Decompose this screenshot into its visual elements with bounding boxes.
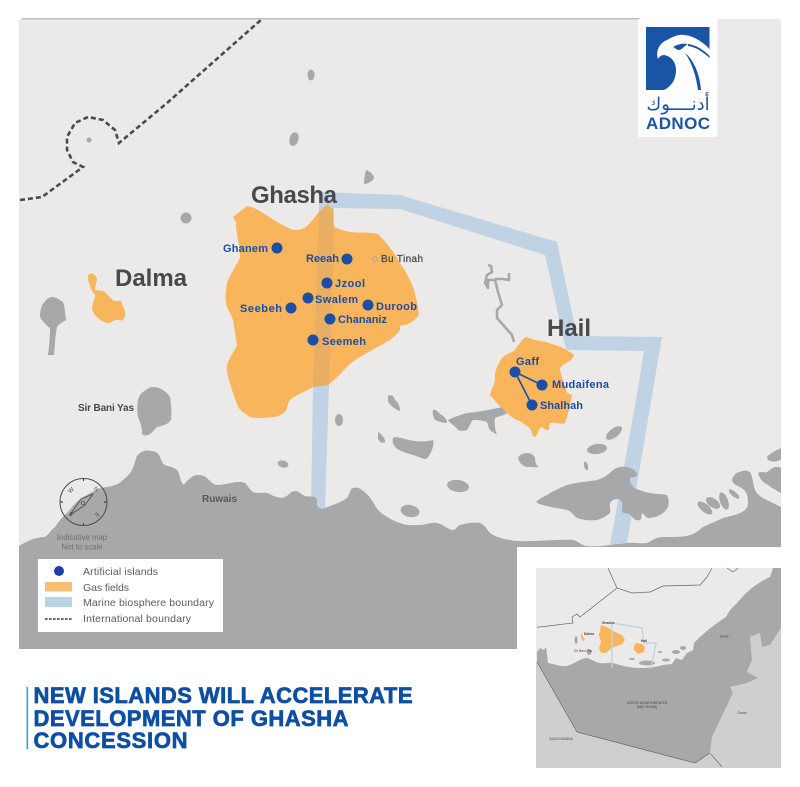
icon: falcon — [657, 35, 710, 90]
artificial island markers and names: Ghasha: Ghanem — [223, 243, 268, 255]
title: CONCESSION — [34, 728, 188, 753]
legend: gas fields — [45, 582, 129, 594]
inset: borders — [537, 568, 738, 767]
artificial island markers and names: Hail: Mudaifena — [552, 379, 610, 391]
inset: labels: Dubai — [720, 634, 729, 638]
inset: labels: Hail — [641, 639, 647, 643]
region label: Dalma: Dalma — [115, 265, 188, 292]
place label: Sir Bani Yas: Sir Bani Yas — [78, 403, 134, 414]
icon: compass: S — [68, 510, 75, 517]
artificial island markers and names: Ghasha: Chananiz — [338, 314, 388, 326]
inset: Abu Dhabi land — [537, 568, 781, 763]
icon: compass: W — [67, 486, 76, 495]
region label: Hail: Hail — [547, 315, 591, 342]
artificial island markers and names: Ghasha: Swalem — [315, 294, 358, 306]
artificial island markers and names: Ghasha: Seebeh — [240, 303, 282, 315]
artificial island markers and names: Ghasha — [223, 242, 417, 348]
legend: international boundary: International boundary — [83, 613, 192, 625]
inset: labels — [549, 621, 747, 741]
inset: gas fields — [581, 625, 645, 654]
land: mainland coast — [19, 450, 781, 649]
artificial island markers and names: Hail — [510, 356, 610, 412]
gas field: Ghasha — [226, 205, 419, 418]
land: pearl-chain causeway island — [485, 265, 514, 342]
inset: labels: Ghasha — [602, 621, 614, 625]
note: indicative map: Not to scale — [61, 542, 103, 552]
note: indicative map: Indicative map — [57, 533, 108, 542]
place label: Ruwais: Ruwais — [202, 494, 237, 505]
logo: Arabic wordmark: أدنــــوك — [646, 92, 710, 115]
gas field: Hail — [490, 337, 574, 437]
marine biosphere boundary band — [311, 192, 662, 545]
note: indicative map — [57, 533, 108, 552]
artificial island markers and names: Ghasha: Jzool — [335, 278, 365, 290]
inset: marine biosphere boundary — [612, 623, 656, 669]
inset: labels: (ABU DHABI) — [637, 705, 657, 709]
inset: labels: Dalma — [584, 632, 594, 636]
land: offshore islands — [40, 70, 781, 520]
artificial island markers and names: Hail: Gaff — [516, 356, 539, 368]
logo: ADNOC — [638, 19, 718, 137]
inset: labels: Oman — [737, 711, 747, 715]
inset: labels: UNITED ARAB EMIRATES — [627, 701, 668, 705]
gas field: Dalma — [88, 273, 125, 323]
icon: compass: N — [92, 486, 99, 494]
legend — [38, 559, 223, 632]
panel: main map — [19, 18, 781, 649]
logo: ADNOC wordmark: ADNOC — [646, 114, 710, 133]
icon: compass — [60, 478, 107, 526]
title: DEVELOPMENT OF GHASHA — [34, 706, 349, 731]
artificial island markers and names: Ghasha: Seemeh — [322, 336, 366, 348]
legend: marine biosphere boundary: Marine biosphere boundary — [83, 597, 215, 609]
legend: artificial islands: Artificial islands — [83, 566, 158, 578]
region label: Ghasha: Ghasha — [251, 182, 338, 209]
inset locator map — [536, 568, 781, 768]
inset: labels: Sir Bani Yas — [574, 649, 592, 653]
international boundary — [20, 19, 262, 200]
title — [26, 683, 412, 753]
icon: compass: E — [93, 511, 100, 518]
artificial island markers and names: Hail: Shalhah — [540, 400, 583, 412]
legend: gas fields: Gas fields — [83, 582, 129, 594]
artificial island markers and names: Ghasha: Reeah — [306, 253, 339, 265]
artificial island markers and names: Ghasha: Duroob — [376, 301, 417, 313]
title: NEW ISLANDS WILL ACCELERATE — [34, 683, 412, 708]
inset: offshore islands — [574, 636, 686, 666]
inset: neighbouring land — [536, 628, 781, 768]
place label: Bu Tinah: Bu Tinah — [381, 254, 423, 265]
inset: labels: SAUDI ARABIA — [549, 737, 574, 741]
